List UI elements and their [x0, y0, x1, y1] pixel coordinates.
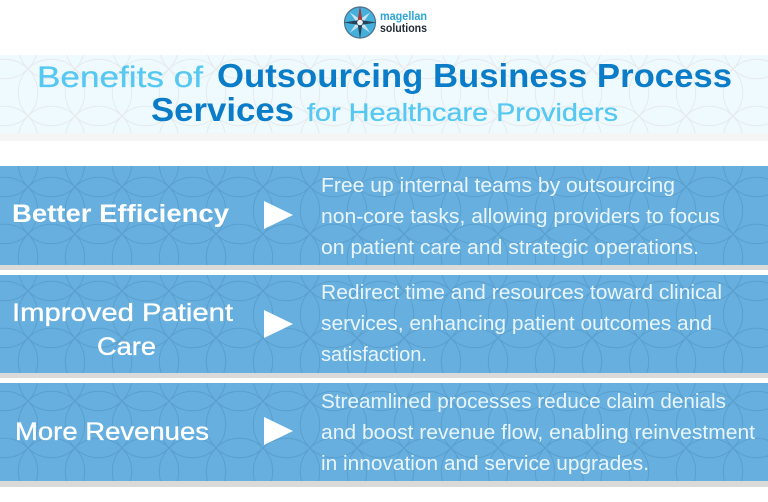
text block: patient care — [321, 282, 722, 366]
title: Services — [151, 91, 294, 128]
text block: efficiency: non-core tasks, allowing providers to focus — [321, 206, 720, 228]
text block: revenues: Streamlined processes reduce claim denials — [321, 391, 726, 413]
logo wordmark: solutions — [380, 21, 427, 35]
arrow — [264, 417, 293, 445]
title — [37, 57, 732, 128]
text block: revenues — [321, 391, 755, 475]
text block: efficiency: on patient care and strategic operations. — [321, 237, 699, 259]
panel: more revenues — [0, 383, 768, 487]
heading: better efficiency: Better Efficiency — [12, 200, 229, 228]
text block: revenues: in innovation and service upgrades. — [321, 453, 649, 475]
title: for Healthcare Providers — [307, 99, 618, 127]
panel: improved patient care — [0, 275, 768, 378]
text block: patient care: satisfaction. — [321, 344, 427, 366]
text block: revenues: and boost revenue flow, enabling reinvestment — [321, 422, 755, 444]
title: Benefits of — [37, 61, 204, 94]
text block: efficiency — [321, 175, 720, 259]
heading: improved patient care — [12, 299, 233, 361]
logo — [344, 6, 427, 39]
text block: patient care: services, enhancing patient outcomes and — [321, 313, 712, 335]
heading: more revenues: More Revenues — [15, 418, 209, 446]
arrow — [264, 310, 293, 338]
heading: improved patient care: Improved Patient — [12, 299, 233, 327]
text block: efficiency: Free up internal teams by outsourcing — [321, 175, 675, 197]
heading: improved patient care: Care — [97, 333, 156, 361]
title banner — [0, 55, 768, 141]
logo wordmark: magellan — [380, 9, 427, 23]
title: Outsourcing Business Process — [217, 57, 732, 94]
arrow — [264, 201, 293, 229]
panel: better efficiency — [0, 166, 768, 270]
logo wordmark — [380, 9, 427, 35]
icon: compass — [344, 6, 376, 39]
text block: patient care: Redirect time and resources toward clinical — [321, 282, 722, 304]
